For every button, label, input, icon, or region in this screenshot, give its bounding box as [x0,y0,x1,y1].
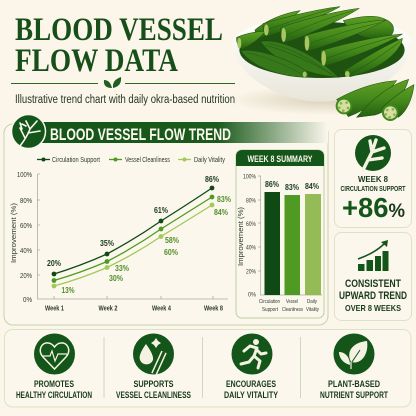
bar chart: Improvement (%) [238,207,245,266]
line chart: 58% [165,235,179,245]
bar chart [238,174,322,313]
panel: week 8 summary [236,150,324,318]
line chart: 83% [217,194,231,204]
line chart: 0% [23,295,32,304]
summary heading: WEEK 8 SUMMARY [248,154,313,165]
section heading: BLOOD VESSEL FLOW TREND [50,126,231,144]
divider with leaf icon [11,77,235,88]
line chart: 100% [17,170,32,179]
line chart: Week 1 [45,306,64,312]
chart legend [37,157,225,164]
line chart: 61% [154,205,168,215]
trend text [339,278,407,313]
chart legend: Vessel Cleanliness [125,157,170,164]
line chart: 84% [214,207,228,217]
title: BLOOD VESSEL [15,12,223,48]
line chart: 60% [164,247,178,257]
icon: rising bars and arrow [358,240,388,271]
illustration: bowl of okra [227,7,416,121]
stat label: WEEK 8 [358,174,388,184]
bar chart: 80% [246,198,256,204]
benefit: healthy circulation: PROMOTES [34,379,74,389]
line chart: 30% [109,273,123,283]
stat value: +86% [342,192,405,223]
line chart: Week 4 [152,306,171,312]
line chart: Improvement (%) [9,202,18,263]
bar chart: 100% [243,174,256,180]
section header bar [36,122,328,143]
line chart [9,170,231,312]
panel: blood vessel flow trend [4,114,328,325]
panel: benefits [4,330,411,407]
icon: vessel branches [355,135,391,171]
trend text: OVER 8 WEEKS [345,303,401,313]
card: consistent upward trend [334,232,412,320]
okra pods [237,7,402,77]
line chart: 60% [20,221,32,230]
okra caps [237,24,350,77]
bar chart: 83% [285,183,299,192]
chart legend: Circulation Support [52,157,100,164]
benefit: healthy circulation: HEALTHY CIRCULATION [16,390,92,400]
benefit: vessel cleanliness [116,334,191,400]
line chart: Week 2 [98,306,118,312]
bar chart: Circulation [259,299,280,305]
benefit: daily vitality [224,334,278,400]
benefit: daily vitality: DAILY VITALITY [224,390,278,400]
benefit: healthy circulation [16,334,92,400]
bar chart: 0% [248,292,256,298]
line chart: 86% [205,174,219,184]
bar chart: Daily [307,299,317,305]
title [15,12,223,79]
line chart: 35% [100,238,114,248]
bar chart: Support [262,307,278,313]
trend text: CONSISTENT [345,278,401,290]
benefit: plant-based nutrient support: PLANT-BASED [328,379,380,389]
chart legend: Daily Vitality [194,157,225,164]
line chart: 33% [115,263,129,273]
pod ridges [247,8,400,76]
loose okra [337,79,414,117]
benefit: vessel cleanliness: VESSEL CLEANLINESS [116,390,191,400]
card: week 8 circulation support [334,130,412,228]
bar chart: Vessel [286,299,298,305]
bar chart: Cleanliness [282,307,303,313]
bar chart: 40% [246,244,256,252]
benefit: vessel cleanliness: SUPPORTS [134,379,174,389]
bar chart: Vitality [306,307,319,313]
subtitle: Illustrative trend chart with daily okra-based nutrition [15,94,235,106]
line chart: 80% [20,196,32,205]
line chart: 20% [47,258,61,268]
bar chart: 20% [246,268,256,276]
stat label [340,174,406,193]
benefit: plant-based nutrient support: NUTRIENT SUPPORT [320,390,388,400]
line chart: 40% [20,246,32,255]
line chart: 13% [62,285,75,295]
bar chart: 60% [246,221,256,228]
line chart: Week 8 [204,306,223,312]
benefit: plant-based nutrient support [320,334,388,400]
icon: blood vessel branches [12,114,46,148]
bar chart: 86% [265,180,279,189]
okra cross sections [336,98,399,121]
title: FLOW DATA [15,43,178,79]
bar chart: 84% [305,182,319,191]
line chart: 20% [20,271,32,280]
benefit: daily vitality: ENCOURAGES [226,379,276,389]
